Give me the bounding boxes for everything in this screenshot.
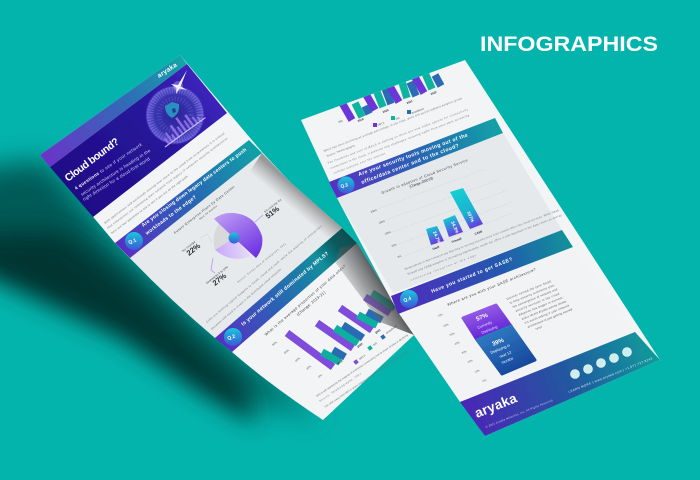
- Q1 label 27 percent: 27%: [211, 271, 228, 288]
- Q4 white body: [398, 246, 635, 402]
- Q3 badge: [338, 176, 354, 194]
- Q2 footnote text: MPLS still represents the majority of enterprise connectivity but its share of sites is declining: [315, 333, 409, 398]
- Q1 chart title: Next 24 months: [198, 204, 219, 221]
- top body text: MPLS has been declining as average percentage of site links, while DIA and broadband adoption grows: [323, 96, 463, 153]
- Q1 radial pie chart: [214, 213, 262, 259]
- top body text: connections in the cloud. It presents new challenges: securing traffic from sites while accessing: [330, 113, 470, 170]
- fold shadow on left sheet: [335, 243, 414, 335]
- header subtitle: 4 questions to see if your network: [74, 142, 144, 191]
- top cropped bar chart: [337, 67, 441, 120]
- Q4 axis labels: 60%: [443, 322, 450, 328]
- Q2 legend: DIA: [372, 341, 378, 347]
- Q3 gray body: [337, 133, 562, 293]
- panel: left sheet: [40, 55, 414, 420]
- Q1 label 27 percent: [205, 258, 229, 288]
- Q2 badge: Q.2: [227, 333, 236, 342]
- Q3 band: [329, 118, 503, 198]
- left sheet paper: [40, 55, 414, 420]
- Q2 axis labels: 60%: [283, 348, 290, 355]
- Q2 axis labels: 2021: [374, 328, 382, 335]
- top chart legend: DIA: [395, 116, 401, 121]
- right sheet paper: [301, 60, 660, 436]
- Q2 footnote text: The shift away from MPLS gives organizations more flexibility in how they connect: [323, 348, 410, 409]
- Q4 axis labels: 50%: [449, 331, 456, 337]
- Q2 axis labels: 20%: [305, 364, 312, 371]
- top chart legend: MPLS: [377, 121, 385, 127]
- Q2 question: Is your network still dominated by MPLS?: [240, 251, 330, 328]
- Q2 legend: [353, 323, 398, 365]
- top body text: The flexibility and cost of MPLS is shifting so there are now viable options for connectivity: [327, 107, 469, 165]
- Q3 axis labels: 100%: [384, 230, 392, 236]
- title: INFOGRAPHICS: [480, 33, 658, 56]
- Q2 axis labels: 0%: [317, 373, 323, 379]
- logo: aryaka footer: aryaka: [473, 390, 519, 421]
- Q4 axis labels: 30%: [461, 349, 468, 355]
- top chart axis labels: 2019: [357, 117, 365, 123]
- Q4 axis labels: 40%: [454, 340, 461, 346]
- Q4 body text: and a recent Aryaka survey shows: [521, 299, 567, 321]
- Q2 chart title: What is the average proportion of your data sites?: [264, 264, 347, 337]
- Q4 badge: [400, 290, 418, 308]
- top chart axis labels: [338, 90, 438, 124]
- Q4 axis labels: 10%: [474, 368, 481, 374]
- top body text: cellular systems over the internet: [333, 151, 386, 175]
- top body text: [323, 96, 470, 175]
- Q4 stacked bar: Deploying: [481, 325, 498, 335]
- Q1 chart title: Future Enterprise Plans by Data Center: [173, 184, 236, 235]
- Q4 chart title: Where are you with your SASE architecture?: [447, 268, 536, 307]
- header subtitle: security architecture is heading in the: [80, 148, 152, 197]
- Q3 body text: firewall and CASB adoption is increasing significantly, inside the office is still important in the data center as well as: [407, 213, 563, 276]
- Q1 note and body text: Source: Survey data of enterprises, 2021: [237, 242, 287, 284]
- Q4 axis labels: 0%: [482, 378, 487, 383]
- Q1 gray body: [130, 153, 342, 338]
- Q4 stacked bar: [463, 305, 535, 374]
- Q2 axis labels: 2019: [336, 359, 344, 366]
- Q1 badge: Q.1: [128, 237, 137, 246]
- Q1 note and body text: therefore still need to invest in the distributed cloud networks: [210, 267, 283, 331]
- Q3 badge: Q.3: [340, 182, 349, 189]
- Q1 label 27 percent: Growing by 5 to 10%: [205, 265, 229, 285]
- Q3 axis labels: 200%: [370, 208, 378, 214]
- Q1 label 22 percent: 22%: [185, 241, 202, 258]
- Q2 band: [215, 228, 357, 352]
- Q1 label 22 percent: [181, 234, 212, 258]
- Q4 axis labels: 20%: [467, 358, 474, 364]
- intro text: that enterprises are rethinking their network from legacy IT networks security architectures: [106, 136, 229, 230]
- header globe illustration: [145, 70, 206, 147]
- Q3 body text: connecting resources at the edge: [410, 253, 477, 282]
- Q4 body text: Gartner coined the term SASE: [506, 279, 552, 301]
- Q2 chart title: (Change, 2019-21): [296, 290, 327, 317]
- Q4 stacked bar: next 12: [499, 351, 512, 359]
- Q4 question: Have you started to get SASE?: [431, 257, 513, 295]
- Q4 band: [391, 230, 573, 314]
- top chart axis labels: 2020: [382, 108, 390, 114]
- top chart axis labels: 2021: [406, 99, 414, 105]
- Q4 stacked bar: months: [501, 357, 514, 365]
- Q1 band: [115, 140, 262, 258]
- Q1 label 51 percent: 51%: [264, 204, 281, 221]
- Q4 body text: architecture is just getting started: [527, 307, 573, 329]
- Q4 body text: the convergence of network and: [512, 287, 558, 309]
- Q2 axis labels: 2020: [356, 342, 364, 349]
- Q3 bar chart: 24.7%: [432, 230, 442, 244]
- Q3 axis labels: 150%: [378, 219, 386, 225]
- Q2 legend: Broadband: [385, 323, 398, 335]
- Q1 label 51 percent: [255, 197, 283, 222]
- Q4 axis labels: 70%: [437, 312, 444, 318]
- Q1 note and body text: CIOs are shifting capital budgets to SaaS, cloud and IaaS, while the majority of enterprises: [205, 224, 323, 324]
- Q3 bar chart: CASB: [474, 229, 483, 236]
- Q4 badge: Q.4: [403, 296, 412, 304]
- header subtitle: right direction for a cloud-first world: [82, 156, 151, 202]
- footer: [460, 332, 660, 436]
- top chart axis labels: 0%: [338, 119, 344, 124]
- Q3 bar chart: 34.3%: [450, 220, 460, 234]
- Q1 fold shading: [240, 153, 342, 254]
- footer copyright: © 2021 Aryaka Networks, Inc. All Rights Reserved: [485, 398, 554, 429]
- Q4 stacked bar: Currently: [477, 320, 493, 330]
- Q1 label 22 percent: No change: [181, 240, 197, 253]
- Q2 axis labels: [271, 328, 382, 379]
- Q1 badge: [125, 232, 143, 250]
- shadow under left sheet: [0, 160, 323, 425]
- intro text: With applications and workloads moving ever more to the cloud from on-premises it is critical: [103, 131, 226, 225]
- infographic scene: [0, 36, 660, 436]
- Q3 axis labels: [370, 208, 403, 259]
- Q3 chart title: Growth in adoption of Cloud Security Service: [381, 158, 468, 195]
- Q4 body text: Adoption has begun in earnest,: [518, 295, 564, 317]
- Q1 label 51 percent: Shrinking by: [263, 197, 283, 214]
- top body text: Source: TeleGeography: [326, 143, 356, 158]
- Q3 bar chart: DaaS: [432, 245, 440, 251]
- Q4 body text: to help security architects plan: [509, 283, 555, 305]
- Q3 question: Are your security tools moving out of the: [358, 133, 469, 178]
- Q3 body text: Respondents in this research say that they're moving security tools from central office into cloud services. While DaaS: [404, 208, 560, 271]
- Q2 axis labels: 40%: [294, 356, 301, 363]
- Q4 stacked bar: Deploying in: [490, 343, 511, 355]
- Q2 axis labels: 80%: [271, 340, 278, 347]
- Q2 legend: MPLS: [358, 353, 366, 361]
- top chart legend: Broadband: [411, 106, 425, 115]
- Q3 bar chart: Firewall: [451, 236, 462, 244]
- Q2 badge: [224, 328, 242, 346]
- Q4 body text: it's worth asking if your network: [524, 303, 570, 325]
- Q3 chart title: (Change, 2020-23): [409, 176, 434, 189]
- Q3 bar chart: 107%: [466, 210, 475, 223]
- Q4 body text: later.: [535, 324, 544, 331]
- top chart legend: [373, 106, 425, 127]
- Q1 question: Are you closing down legacy data centers to push: [141, 147, 248, 229]
- Q2 footnote text: Source: TeleGeography, 2021: [318, 371, 362, 403]
- Q1 question: workloads to the edge?: [144, 194, 198, 237]
- Q4 body text: security services in the cloud.: [515, 291, 561, 313]
- Q4 axis labels: [437, 312, 487, 383]
- Q3 bar chart: [426, 188, 483, 251]
- Q2 bar chart: [287, 293, 395, 367]
- Q4 stacked bar: 39%: [492, 338, 506, 348]
- Q4 stacked bar: 57%: [476, 313, 490, 323]
- Q3 grid lines: [378, 169, 512, 256]
- footer social icons: [570, 348, 632, 378]
- Q3 axis labels: 0%: [397, 254, 403, 259]
- top chart axis labels: 2022: [430, 90, 438, 96]
- Q4 body text: [506, 279, 573, 331]
- header panel: [50, 64, 227, 217]
- footer contact: LEARN MORE | www.aryaka.com | +1.877.727.9243: [568, 356, 653, 394]
- logo: aryaka small: aryaka: [156, 62, 179, 80]
- header headline: Cloud bound?: [63, 136, 122, 184]
- panel: right sheet: [301, 60, 660, 436]
- Q3 axis labels: 50%: [391, 242, 398, 248]
- top logo strip: [40, 55, 187, 167]
- intro text: here are four questions to ask to see if you are on the right path: [110, 174, 189, 235]
- Q3 question: office/data center and to the cloud?: [361, 143, 460, 186]
